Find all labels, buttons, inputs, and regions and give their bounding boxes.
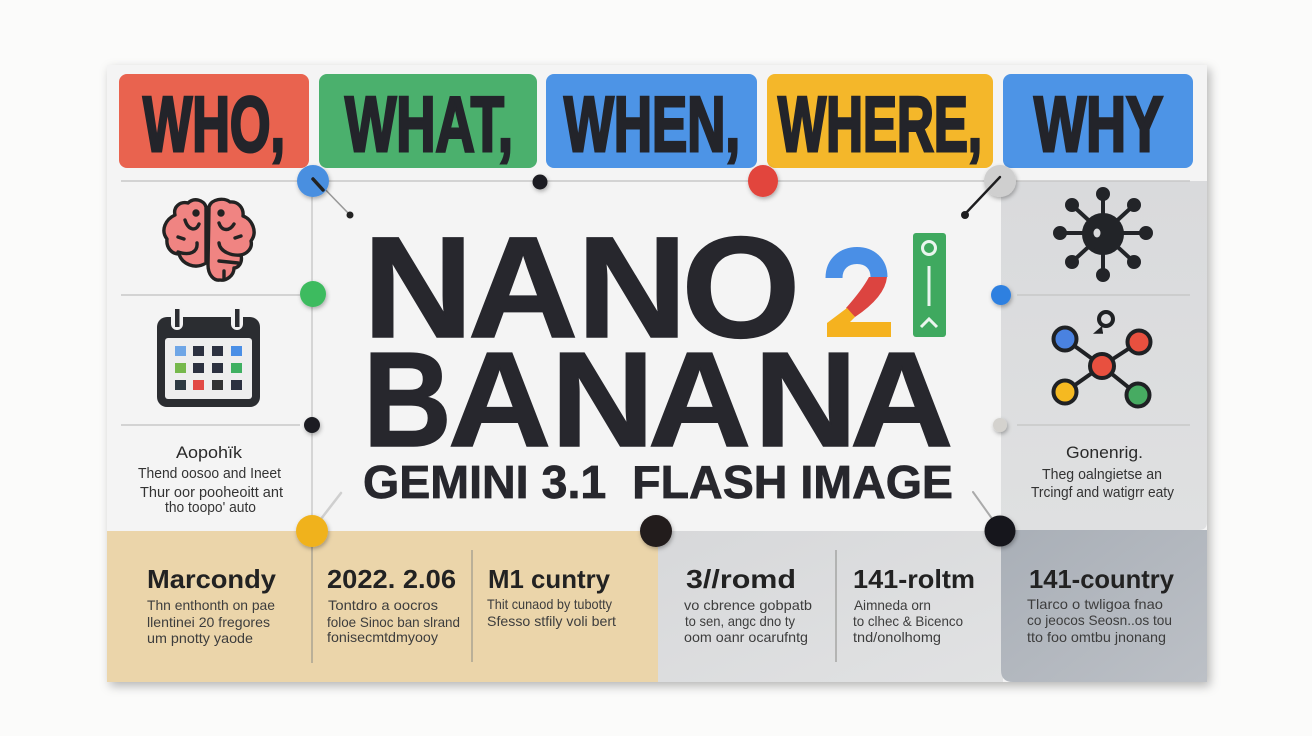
panel: bottom tan section: [107, 531, 658, 682]
stat: 2022. 2.06: [327, 564, 460, 645]
title: nano: NANO: [363, 208, 800, 368]
pin: black left: [304, 417, 320, 433]
panel: bottom dark grey section: [1001, 530, 1207, 682]
icon: hub with radiating nodes: [1055, 189, 1151, 280]
stat: 3//romd: vo cbrence gobpatb: [684, 597, 812, 613]
stat: 2022. 2.06: Tontdro a oocros: [328, 597, 438, 613]
heading: where: WHERE,: [778, 80, 982, 168]
heading: when: [546, 74, 757, 168]
heading: where: [767, 74, 993, 168]
pin: green left: [300, 281, 326, 307]
stat: m1 cuntry: Thit cunaod by tubotty: [487, 596, 612, 612]
pin: blue right: [991, 285, 1011, 305]
text block: right column note: [1031, 443, 1174, 501]
heading: what: [319, 74, 537, 168]
icon: calendar: [157, 306, 260, 407]
stat: m1 cuntry: Sfesso stfily voli bert: [487, 613, 616, 629]
stat: m1 cuntry: M1 cuntry: [488, 564, 611, 594]
stat: 141-country: [1027, 564, 1175, 645]
title: banana: ANANA: [448, 325, 953, 475]
stat: 141-roltm: tnd/onolhomg: [853, 629, 941, 645]
pin: pale right: [993, 418, 1007, 432]
panel: bottom grey section: [658, 531, 1003, 682]
stat: marcondy: Marcondy: [147, 564, 277, 594]
heading: what: WHAT,: [345, 80, 513, 168]
stat: 141-roltm: 141-roltm: [853, 564, 975, 594]
pin: black bottom centre: [640, 515, 672, 547]
panel: right column: [1001, 181, 1207, 530]
text block: left column note: Aopohïk: [176, 443, 243, 462]
subtitle: gemini 3.1 flash image: GEMINI 3.1 FLASH IMAGE: [363, 456, 953, 508]
stat: 2022. 2.06: 2022. 2.06: [327, 564, 456, 594]
title: banana: B: [363, 325, 452, 475]
heading: who: [119, 74, 309, 168]
text block: left column note: Thend oosoo and Ineet: [138, 465, 282, 482]
pin: grey top right: [961, 165, 1016, 219]
stat: 3//romd: to sen, angc dno ty: [685, 613, 795, 629]
pin: black bottom right: [973, 492, 1016, 546]
text block: left column note: Thur oor pooheoitt ant: [140, 484, 284, 501]
pin: small black top: [532, 174, 548, 190]
text block: right column note: Theg oalngietse an: [1042, 466, 1162, 483]
icon: brain: [164, 199, 254, 280]
stat: 141-country: tto foo omtbu jnonang: [1027, 629, 1166, 645]
text block: right column note: Trcingf and watigrr eaty: [1031, 484, 1174, 501]
text block: left column note: [138, 443, 284, 516]
heading: when: WHEN,: [564, 80, 740, 168]
stat: 3//romd: 3//romd: [686, 564, 796, 594]
panel: main board: [107, 65, 1207, 682]
stat: marcondy: Thn enthonth on pae: [147, 597, 275, 613]
stat: 141-roltm: Aimneda orn: [854, 597, 931, 613]
stat: 141-roltm: to clhec & Bicenco: [853, 613, 963, 629]
icon: multicolour numeral 2: [827, 256, 891, 337]
heading: who: WHO,: [143, 80, 285, 168]
stat: marcondy: llentinei 20 fregores: [147, 614, 270, 630]
stat: 3//romd: oom oanr ocarufntg: [684, 629, 808, 645]
stat: m1 cuntry: [487, 564, 616, 629]
stat: 2022. 2.06: foloe Sinoc ban slrand: [327, 614, 460, 630]
icon: coloured node network: [1054, 312, 1150, 406]
text block: left column note: tho toopo' auto: [165, 499, 256, 516]
icon: green vertical badge: [913, 233, 946, 337]
stat: 2022. 2.06: fonisecmtdmyooy: [327, 629, 438, 645]
pin: blue top left: [297, 165, 354, 218]
heading: why: WHY: [1034, 80, 1163, 168]
stat: 141-country: co jeocos Seosn..os tou: [1027, 612, 1172, 628]
stat: 141-country: 141-country: [1029, 564, 1175, 594]
stat: marcondy: [147, 564, 277, 646]
stat: 141-roltm: [853, 564, 975, 645]
stat: 141-country: Tlarco o twligoa fnao: [1027, 596, 1163, 612]
stat: 3//romd: [684, 564, 812, 645]
pin: red top: [748, 165, 778, 197]
text block: right column note: Gonenrig.: [1066, 443, 1143, 462]
stat: marcondy: um pnotty yaode: [147, 630, 253, 646]
pin: yellow bottom left: [296, 493, 341, 547]
